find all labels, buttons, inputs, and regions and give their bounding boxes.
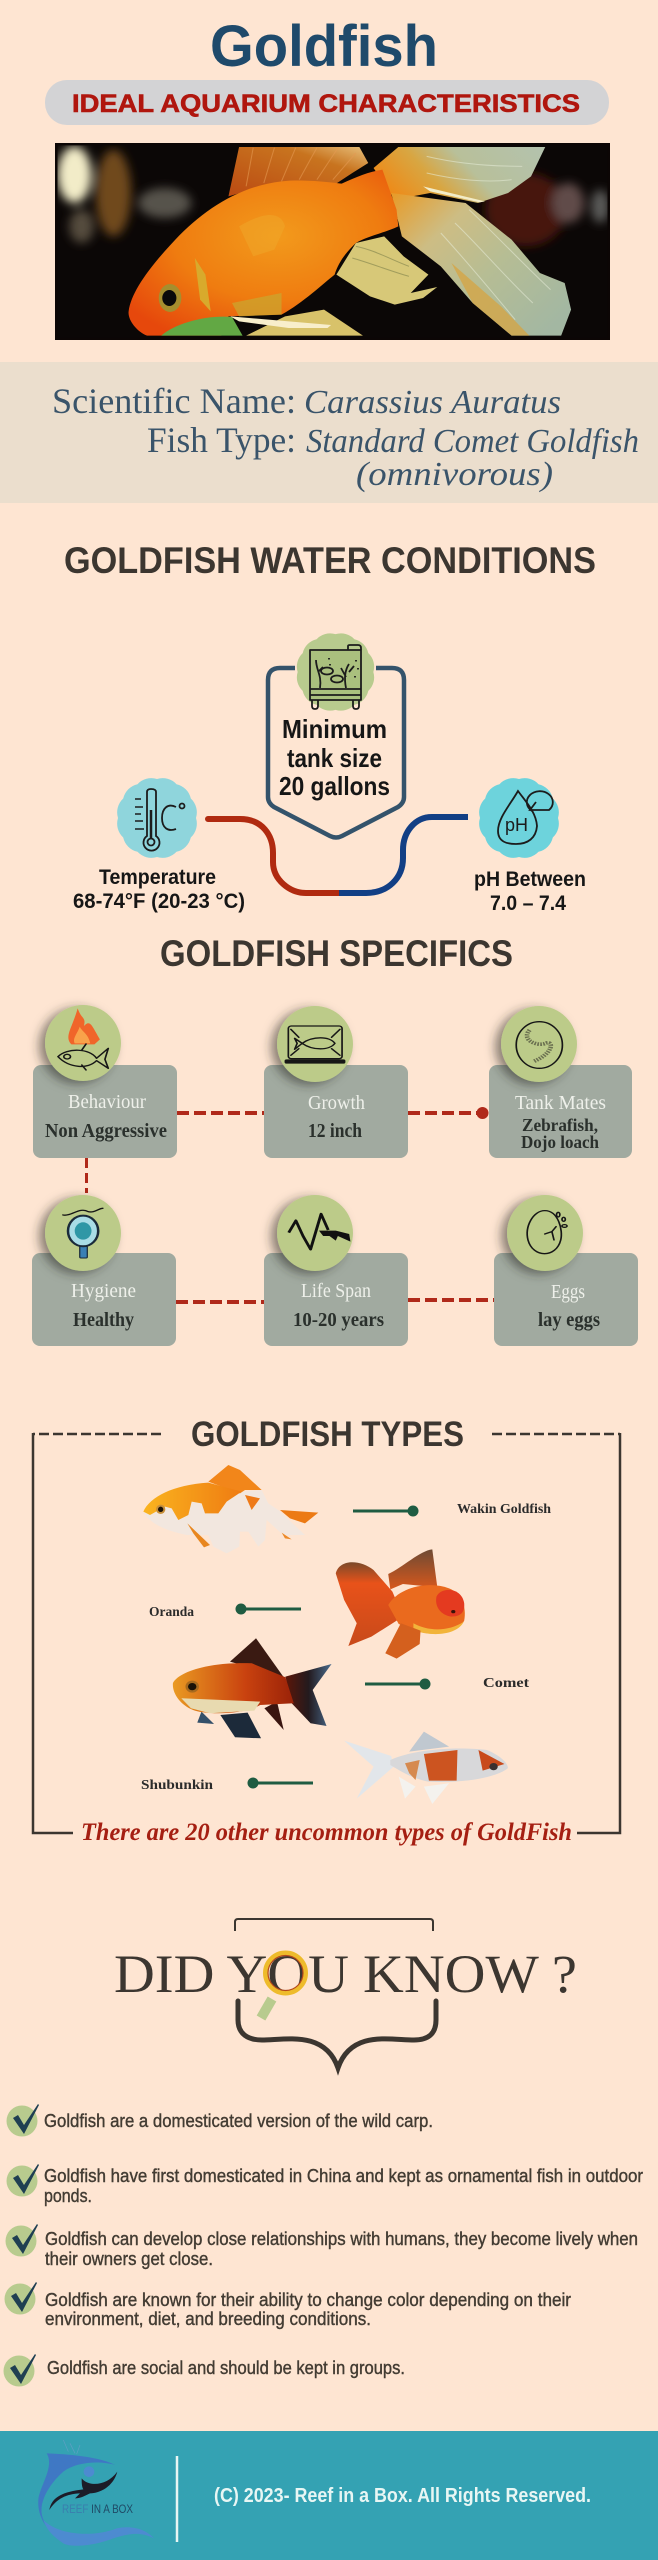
- label: shubunkin: Shubunkin: [141, 1778, 213, 1793]
- icon: zebrafish circle: [516, 1022, 562, 1068]
- icon: fish on laptop: [285, 1026, 345, 1064]
- heading: did you know: DID YOU KNOW ?: [114, 1944, 577, 2004]
- panel: growth: [264, 1006, 408, 1158]
- label: wakin goldfish: [353, 1502, 551, 1517]
- panel: life span: [264, 1195, 408, 1346]
- info band: scientific name and fish type: Scientific Name:: [52, 381, 296, 421]
- panel: life span: 10-20 years: [293, 1309, 384, 1331]
- panel: eggs: Eggs: [551, 1281, 585, 1303]
- info band: scientific name and fish type: [0, 362, 658, 503]
- dashed connectors: [86, 1107, 494, 1302]
- fact 2: ponds.: [44, 2186, 92, 2206]
- title: Goldfish: [210, 14, 438, 79]
- icon: magnifying glass: [261, 1953, 306, 2018]
- fact list: [4, 2104, 643, 2386]
- panel: hygiene: Healthy: [73, 1309, 134, 1331]
- temperature text: [73, 866, 245, 913]
- frame around goldfish types: [33, 1433, 620, 1833]
- heading: goldfish types: GOLDFISH TYPES: [191, 1415, 464, 1454]
- pipe connector: red and blue: [208, 817, 468, 893]
- panel: tank mates: Tank Mates: [515, 1092, 606, 1114]
- fact 5: Goldfish are social and should be kept in groups.: [47, 2358, 405, 2378]
- fact 3: their owners get close.: [45, 2249, 213, 2269]
- footer band: (C) 2023- Reef in a Box. All Rights Reserved.: [214, 2485, 591, 2507]
- callout: uncommon types: There are 20 other uncommon types of GoldFish: [81, 1819, 572, 1846]
- panel: tank mates: Zebrafish,: [522, 1115, 598, 1135]
- label: shubunkin: [141, 1778, 313, 1793]
- icon: thermometer: [117, 778, 197, 858]
- info band: scientific name and fish type: Standard Comet Goldfish: [306, 423, 639, 460]
- panel: eggs: lay eggs: [538, 1309, 600, 1331]
- fact 4: Goldfish are known for their ability to change color depending on their: [45, 2290, 571, 2310]
- fact 1: [6, 2104, 433, 2136]
- temperature text: 68-74°F (20-23 °C): [73, 890, 245, 913]
- tank size text: [279, 714, 390, 801]
- fact 2: [6, 2164, 643, 2206]
- panel: tank mates: Dojo loach: [521, 1132, 599, 1152]
- label: comet: Comet: [483, 1676, 529, 1691]
- panel: behaviour: [33, 1005, 177, 1158]
- panel: growth: 12 inch: [308, 1120, 362, 1142]
- fact 4: environment, diet, and breeding conditions.: [45, 2309, 371, 2329]
- logo: reef in a box: REEF IN A BOX: [62, 2502, 133, 2516]
- label: oranda: Oranda: [149, 1605, 194, 1620]
- panel: life span: Life Span: [301, 1280, 371, 1302]
- subtitle pill: [45, 80, 609, 125]
- pH text: pH Between: [474, 868, 586, 891]
- subtitle pill: IDEAL AQUARIUM CHARACTERISTICS: [72, 90, 580, 118]
- heading: did you know: [114, 1919, 577, 2068]
- illustration: oranda: [336, 1549, 465, 1659]
- info band: scientific name and fish type: Carassius Auratus: [304, 384, 561, 421]
- footer band: [0, 2431, 658, 2560]
- icon: aquarium tank: [297, 633, 374, 711]
- icon: heartbeat and fish: [289, 1214, 350, 1249]
- tank size text: Minimum: [282, 714, 387, 744]
- label: oranda: [149, 1604, 301, 1620]
- illustration: wakin goldfish: [143, 1465, 318, 1553]
- fact 5: [4, 2354, 405, 2386]
- heading: specifics: GOLDFISH SPECIFICS: [160, 933, 513, 974]
- tank size text: tank size: [287, 743, 382, 773]
- tank size text: 20 gallons: [279, 771, 390, 801]
- fact 3: [6, 2224, 638, 2269]
- panel: hygiene: Hygiene: [71, 1280, 136, 1302]
- heading: water conditions: GOLDFISH WATER CONDITIONS: [64, 540, 596, 581]
- panel: eggs: [494, 1195, 638, 1346]
- fact 1: Goldfish are a domesticated version of the wild carp.: [44, 2111, 433, 2131]
- temperature text: Temperature: [99, 866, 216, 889]
- panel: growth: Growth: [308, 1092, 365, 1114]
- label: comet: [365, 1676, 529, 1691]
- label: wakin goldfish: Wakin Goldfish: [457, 1502, 551, 1517]
- info band: scientific name and fish type: (omnivorous): [356, 456, 553, 493]
- info band: scientific name and fish type: Fish Type:: [147, 420, 296, 460]
- icon: flame and fish: [58, 1008, 108, 1070]
- logo: reef in a box: [38, 2440, 154, 2546]
- panel: behaviour: Behaviour: [68, 1091, 146, 1113]
- illustration: shubunkin: [344, 1732, 508, 1804]
- icon: magnifier: [63, 1208, 103, 1258]
- hero photo: goldfish: [55, 143, 610, 340]
- icon: egg: [527, 1211, 567, 1254]
- panel: hygiene: [32, 1195, 176, 1346]
- pH text: [474, 868, 586, 915]
- panel: minimum tank size: [268, 633, 404, 838]
- icon: pH drop: pH: [505, 815, 528, 835]
- panel: behaviour: Non Aggressive: [45, 1120, 167, 1142]
- icon: pH drop: [479, 778, 559, 858]
- pH text: 7.0 – 7.4: [490, 892, 566, 915]
- fact 4: [4, 2282, 571, 2329]
- panel: tank mates: [489, 1006, 632, 1158]
- illustration: comet: [173, 1638, 332, 1738]
